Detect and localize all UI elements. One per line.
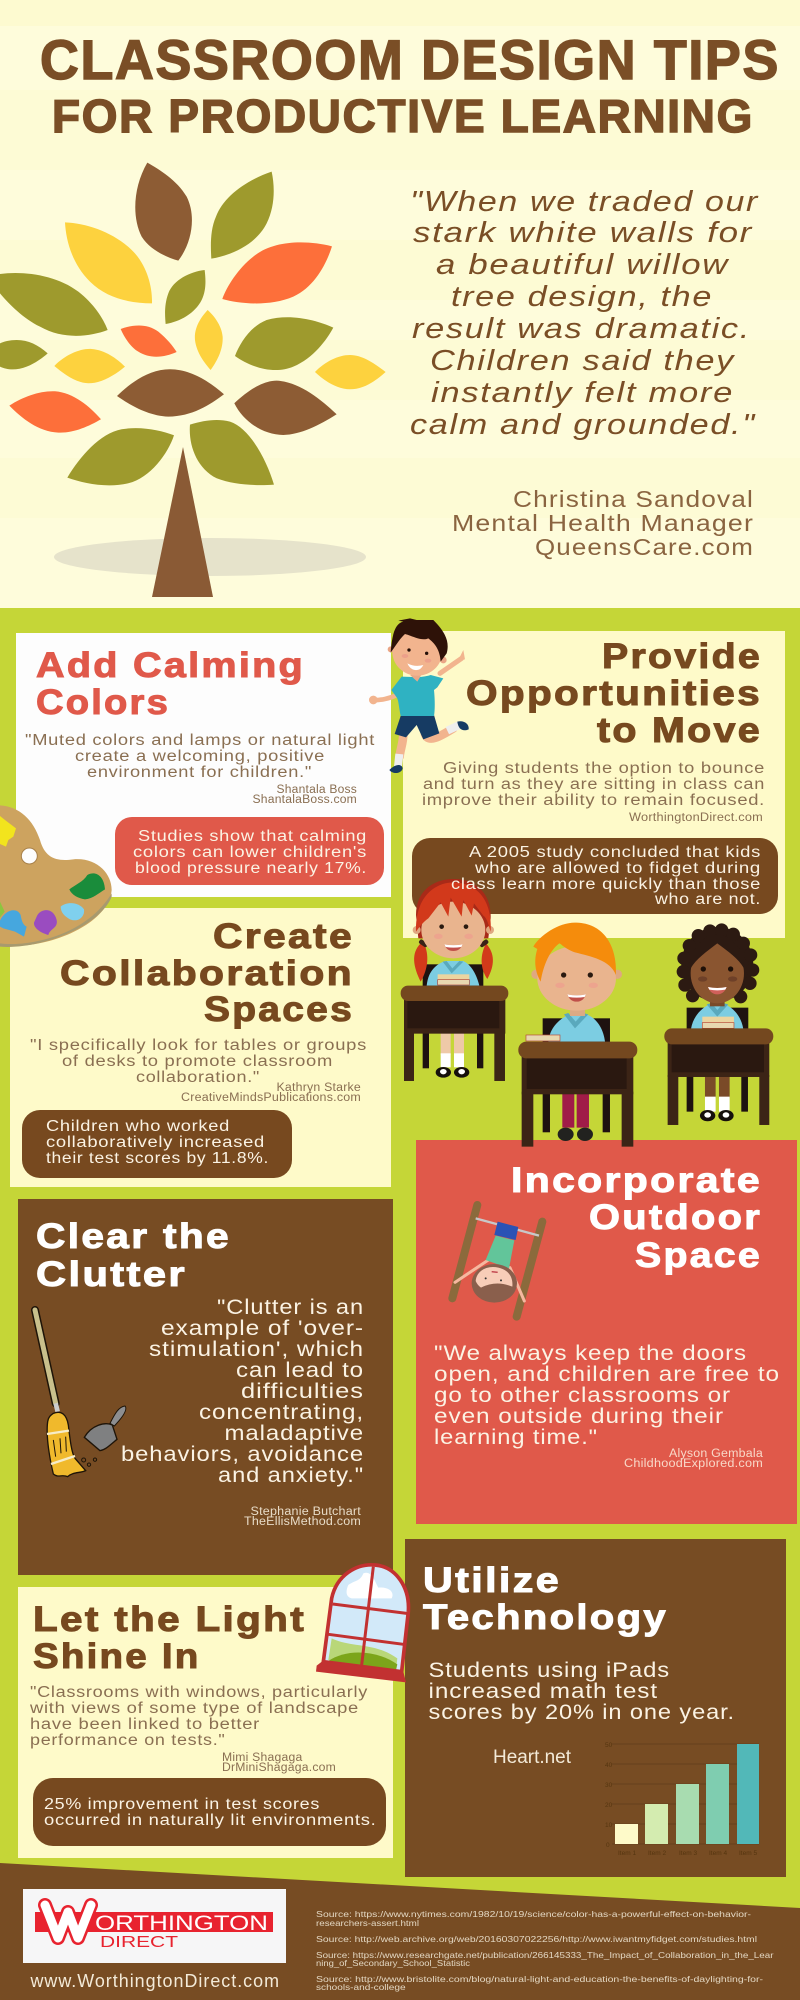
source: Mimi Shagaga: [222, 1752, 303, 1764]
icon: child on monkey bars: [452, 1205, 542, 1317]
heading: Collaboration: [60, 954, 354, 993]
bar chart: Item 2: [648, 1850, 666, 1857]
bar chart: Item 4: [709, 1850, 727, 1857]
quote text: maladaptive: [224, 1422, 364, 1445]
panel: create collaboration spaces: [10, 908, 391, 1187]
source: ShantalaBoss.com: [252, 794, 357, 806]
heading: Provide: [602, 637, 762, 676]
heading: [33, 1600, 306, 1676]
source: DrMiniShagaga.com: [222, 1762, 336, 1774]
quote text: and anxiety.": [218, 1464, 364, 1487]
stat pill: their test scores by 11.8%.: [46, 1150, 269, 1167]
heading: Let the Light: [33, 1600, 306, 1639]
source: Heart.net: [493, 1747, 572, 1768]
sources: researchers-assert.html: [316, 1918, 419, 1928]
stat pill: [22, 1110, 292, 1178]
quote attribution: Christina Sandoval: [513, 486, 754, 512]
quote text: open, and children are free to: [434, 1363, 780, 1386]
icon: jumping boy: [369, 618, 469, 773]
quote text: create a welcoming, positive: [75, 748, 325, 765]
panel: let the light shine in: [18, 1587, 393, 1858]
heading: [423, 1561, 668, 1637]
source: ChildhoodExplored.com: [624, 1458, 763, 1470]
source: [181, 1082, 361, 1104]
source: Stephanie Butchart: [250, 1506, 362, 1518]
stat pill: colors can lower children's: [133, 844, 367, 861]
bar chart: 40: [605, 1762, 613, 1769]
quote text: example of 'over-: [161, 1317, 364, 1340]
icon: broom and dustpan: [35, 1310, 126, 1477]
heading: Opportunities: [466, 674, 762, 713]
body text: Giving students the option to bounce: [443, 760, 765, 777]
source: [222, 1752, 336, 1774]
bar chart: Item 5: [739, 1850, 757, 1857]
bar chart: 30: [605, 1782, 613, 1789]
heading: Spaces: [204, 990, 354, 1029]
title: [40, 29, 780, 143]
body text: improve their ability to remain focused.: [422, 792, 765, 809]
quote: stark white walls for: [413, 217, 753, 249]
stat pill: collaboratively increased: [46, 1134, 265, 1151]
stat pill: 25% improvement in test scores: [44, 1796, 320, 1813]
bar chart: 50: [605, 1742, 613, 1749]
dark-haired girl: [664, 923, 773, 1125]
heading: Shine In: [33, 1637, 201, 1676]
heading: Outdoor: [589, 1198, 762, 1237]
source: Alyson Gembala: [669, 1448, 763, 1460]
quote text: [30, 1037, 367, 1086]
logo: DIRECT: [100, 1934, 178, 1951]
fidget study text over pill: [451, 844, 761, 908]
quote text: stimulation', which: [149, 1338, 364, 1361]
sources: [316, 1909, 774, 1992]
bar chart: Item 3: [679, 1850, 697, 1857]
quote text: difficulties: [241, 1380, 364, 1403]
bar chart: Item 1: [618, 1850, 636, 1857]
title: CLASSROOM DESIGN TIPS: [40, 29, 780, 91]
sources: Source: http://www.bristolite.com/blog/natural-light-and-education-the-benefits-of-daylighting-for-: [316, 1974, 763, 1984]
quote text: [434, 1342, 780, 1449]
stat pill background: [412, 838, 778, 914]
quote text: "Muted colors and lamps or natural light: [25, 732, 375, 749]
body text: scores by 20% in one year.: [428, 1701, 735, 1724]
quote: a beautiful willow: [436, 249, 730, 281]
quote text: go to other classrooms or: [434, 1384, 731, 1407]
quote text: "Clutter is an: [217, 1296, 364, 1319]
source: WorthingtonDirect.com: [629, 812, 763, 824]
bar chart: 20: [605, 1802, 613, 1809]
bar chart: 10: [605, 1822, 613, 1829]
stat pill: Studies show that calming: [138, 828, 367, 845]
heading: Utilize: [423, 1561, 561, 1600]
quote text: environment for children.": [87, 764, 312, 781]
heading: Incorporate: [511, 1161, 762, 1200]
quote attribution: QueensCare.com: [535, 534, 754, 560]
sources: schools-and-college: [316, 1982, 406, 1992]
quote text: concentrating,: [199, 1401, 364, 1424]
quote text: "Classrooms with windows, particularly: [30, 1684, 368, 1701]
panel: utilize technology: [405, 1539, 786, 1877]
fidget study text over pill: who are not.: [654, 891, 761, 908]
body text: [428, 1659, 735, 1724]
source: [252, 784, 357, 806]
source: [624, 1448, 763, 1470]
heading: Technology: [423, 1598, 668, 1637]
quote text: [121, 1296, 364, 1487]
illustration: three children at desks: [401, 879, 773, 1147]
logo: [23, 1889, 286, 1963]
quote: result was dramatic.: [412, 313, 751, 345]
body text: [422, 760, 765, 809]
heading: Create: [213, 917, 354, 956]
heading: Clear the: [36, 1217, 231, 1256]
heading: [36, 1217, 231, 1294]
stat pill: [115, 817, 384, 885]
quote text: behaviors, avoidance: [121, 1443, 364, 1466]
fidget study text over pill: class learn more quickly than those: [451, 876, 761, 893]
bar chart: [605, 1742, 759, 1857]
sources: ning_of_Secondary_School_Statistic: [316, 1958, 471, 1968]
stat pill: [33, 1778, 386, 1846]
heading: [36, 646, 305, 722]
heading: [466, 637, 762, 750]
quote text: even outside during their: [434, 1405, 724, 1428]
quote text: [25, 732, 375, 781]
quote: "When we traded our: [410, 186, 759, 218]
quote text: collaboration.": [136, 1069, 260, 1086]
quote: instantly felt more: [431, 377, 734, 409]
source: CreativeMindsPublications.com: [181, 1092, 361, 1104]
quote attribution: Mental Health Manager: [452, 510, 754, 536]
source: Kathryn Starke: [276, 1082, 361, 1094]
heading: Colors: [36, 683, 170, 722]
website: www.WorthingtonDirect.com: [30, 1971, 280, 1991]
bar chart: 0: [606, 1842, 610, 1849]
icon: tree: [0, 163, 386, 597]
panel: provide opportunities to move: [403, 631, 785, 938]
sources: Source: https://www.nytimes.com/1982/10/19/science/color-has-a-powerful-effect-on-behavior-: [316, 1909, 751, 1919]
quote attribution: [452, 486, 754, 560]
source: [244, 1506, 362, 1528]
orange-haired boy: [518, 923, 637, 1147]
heading: Clutter: [36, 1255, 187, 1294]
panel: clear the clutter: [18, 1199, 393, 1575]
quote text: [29, 1684, 368, 1749]
quote text: can lead to: [236, 1359, 364, 1382]
fidget study text over pill: A 2005 study concluded that kids: [469, 844, 761, 861]
source: TheEllisMethod.com: [244, 1516, 361, 1528]
logo: ORTHINGTON: [95, 1912, 268, 1935]
quote: [410, 186, 759, 441]
body text: and turn as they are sitting in class can: [423, 776, 765, 793]
fidget study text over pill: who are allowed to fidget during: [474, 860, 761, 877]
icon: window: [316, 1565, 408, 1682]
title: FOR PRODUCTIVE LEARNING: [52, 91, 754, 143]
quote text: learning time.": [434, 1426, 598, 1449]
quote: Children said they: [430, 345, 735, 377]
heading: [511, 1161, 762, 1275]
quote text: "We always keep the doors: [434, 1342, 747, 1365]
green background: [0, 608, 800, 1908]
heading: Space: [635, 1236, 762, 1275]
panel: add calming colors: [16, 633, 391, 897]
icon: paint palette: [0, 805, 112, 947]
panel: incorporate outdoor space: [416, 1140, 797, 1524]
quote text: have been linked to better: [30, 1716, 260, 1733]
quote text: with views of some type of landscape: [29, 1700, 359, 1717]
sources: Source: http://web.archive.org/web/20160307022256/http://www.iwantmyfidget.com/studies.html: [316, 1934, 757, 1944]
stat pill: occurred in naturally lit environments.: [44, 1812, 377, 1829]
quote: calm and grounded.": [410, 409, 756, 441]
heading: to Move: [597, 711, 762, 750]
quote: tree design, the: [451, 281, 713, 313]
quote text: "I specifically look for tables or groups: [30, 1037, 367, 1054]
heading: Add Calming: [36, 646, 305, 685]
quote text: of desks to promote classroom: [62, 1053, 333, 1070]
stat pill: Children who worked: [46, 1118, 230, 1135]
body text: increased math test: [428, 1680, 658, 1703]
red-haired girl: [401, 879, 508, 1081]
footer band: [0, 1863, 800, 2000]
sources: Source: https://www.researchgate.net/publication/266145333_The_Impact_of_Collaboration_in_the_Lear: [316, 1950, 774, 1960]
stat pill: blood pressure nearly 17%.: [135, 860, 367, 877]
heading: [60, 917, 354, 1029]
quote text: performance on tests.": [30, 1732, 226, 1749]
body text: Students using iPads: [428, 1659, 670, 1682]
source: Shantala Boss: [276, 784, 357, 796]
